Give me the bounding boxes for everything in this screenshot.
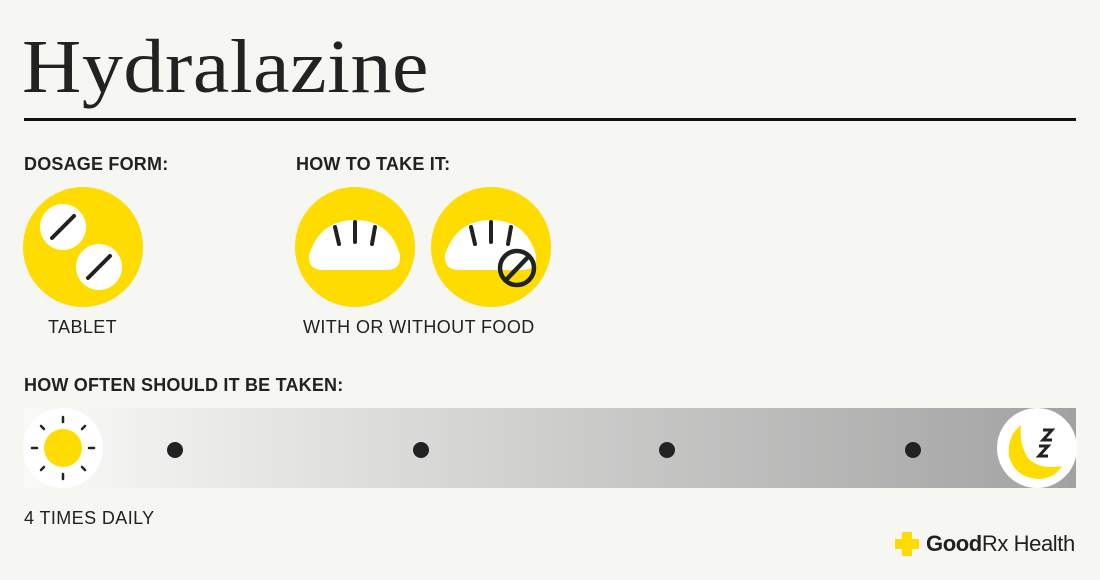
icon: tablets (23, 187, 143, 307)
icon: with food (295, 187, 415, 307)
icon: sun (23, 408, 103, 488)
icon: without food (431, 187, 551, 307)
heading: dosage form: DOSAGE FORM: (24, 154, 168, 174)
label: with or without food: WITH OR WITHOUT FOOD (303, 317, 535, 337)
icon: moon (997, 408, 1077, 488)
logo: GoodRx Health: GoodRx Health (926, 531, 1075, 556)
dots (167, 442, 921, 458)
title: Hydralazine (22, 25, 429, 109)
heading: how often: HOW OFTEN SHOULD IT BE TAKEN: (24, 375, 343, 395)
label: 4 times daily: 4 TIMES DAILY (24, 508, 155, 528)
label: tablet: TABLET (48, 317, 117, 337)
heading: how to take it: HOW TO TAKE IT: (296, 154, 450, 174)
timeline bar (24, 408, 1076, 488)
